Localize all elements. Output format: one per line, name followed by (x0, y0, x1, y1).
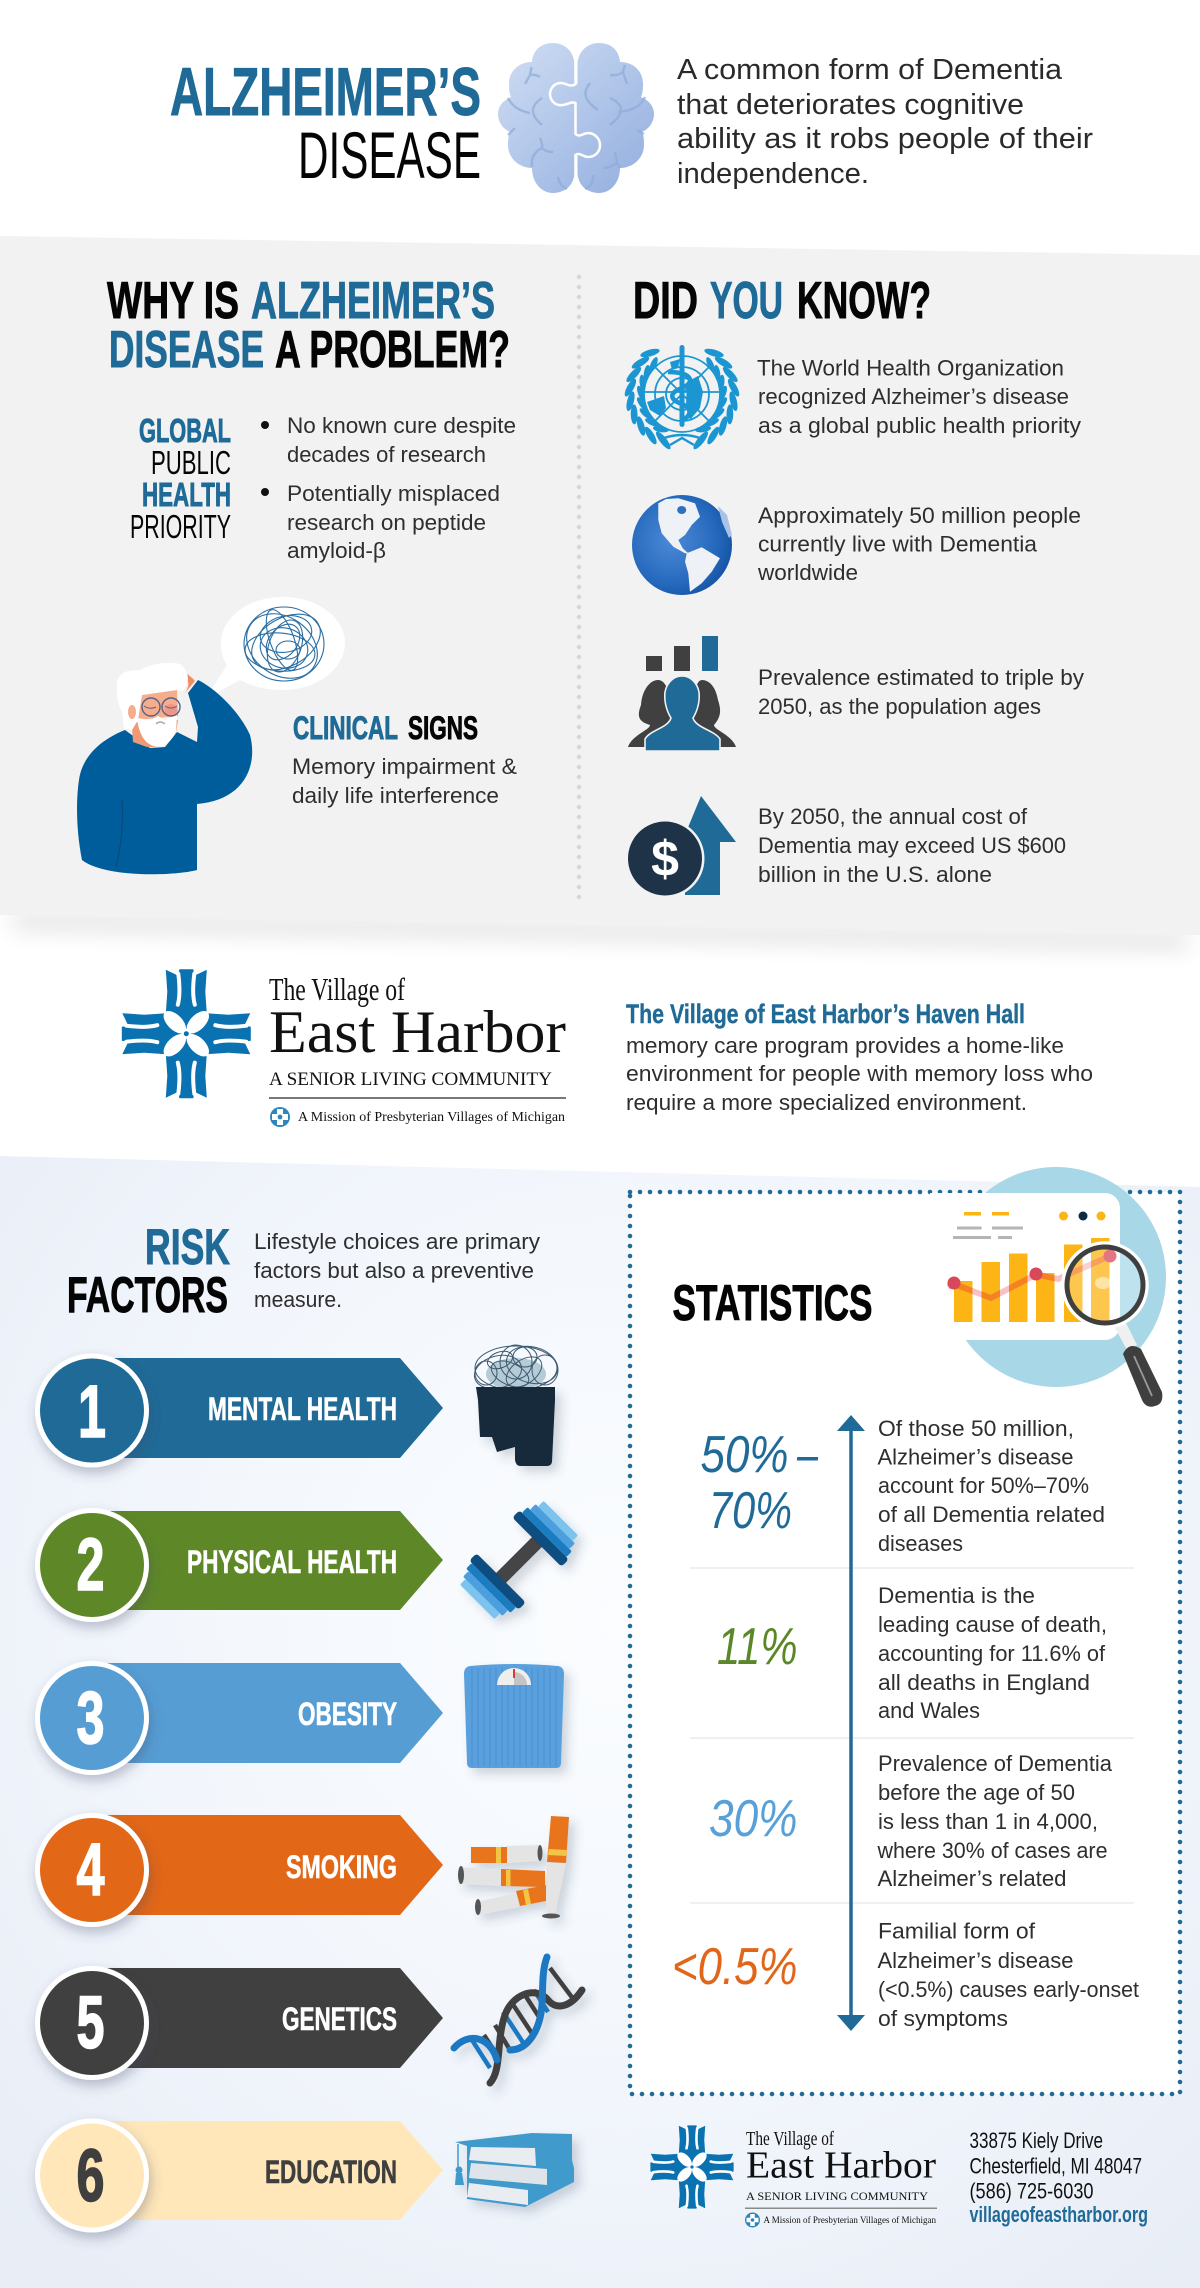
heading: did you know (633, 272, 931, 330)
heading: did you know: YOU (710, 272, 783, 330)
intro text (677, 54, 1093, 190)
intro text: that deteriorates cognitive (677, 89, 1024, 121)
risk 3: obesity (35, 1661, 443, 1775)
logo: East Harbor main: A Mission of Presbyterian Villages of Michigan (298, 1109, 565, 1124)
stat: 11%: 11% (717, 1618, 798, 1676)
speech bubble with scribble (205, 597, 345, 699)
logo: East Harbor footer: East Harbor (746, 2145, 936, 2187)
intro text: ability as it robs people of their (677, 123, 1093, 155)
double-headed arrow (837, 1415, 865, 2031)
bullet list: decades of research (287, 442, 486, 467)
contact details: (586) 725-6030 (970, 2179, 1094, 2204)
title: ALZHEIMER’S (170, 54, 481, 130)
stat: <0.5%: of symptoms (878, 2006, 1008, 2031)
label: global public health priority (130, 412, 231, 545)
fact: WHO: recognized Alzheimer’s disease (758, 384, 1069, 409)
risk 5: genetics (35, 1966, 443, 2080)
logo: East Harbor main: A SENIOR LIVING COMMUNITY (269, 1070, 552, 1090)
panel: lower background (0, 1156, 1200, 2288)
magnifier (1063, 1243, 1162, 1407)
risk 3: obesity: 3 (76, 1676, 104, 1759)
stat: 30%: Alzheimer’s related (878, 1866, 1066, 1891)
stat: 11%: accounting for 11.6% of (878, 1641, 1106, 1666)
icon: books with graduation cap (455, 2133, 574, 2207)
fact: WHO: as a global public health priority (758, 413, 1081, 438)
stat: 50-70%: 70% (709, 1482, 792, 1540)
title: DISEASE (298, 118, 481, 192)
contact details: 33875 Kiely Drive (970, 2128, 1103, 2153)
stat: 50-70%: Of those 50 million, (878, 1416, 1074, 1441)
icon: dollar with arrow: $ (651, 831, 679, 887)
icon: head with tangled thoughts (471, 1341, 562, 1466)
stat: 30% (709, 1751, 1113, 1891)
bullet list: Potentially misplaced (287, 481, 500, 506)
icon: population bars (628, 636, 736, 751)
clinical signs: Memory impairment & (292, 754, 517, 779)
panel: why a problem and did you know (0, 236, 1200, 935)
heading: why is alzheimer's disease a problem: A PROBLEM? (275, 321, 510, 379)
label: global public health priority: PRIORITY (130, 508, 231, 545)
clinical signs: CLINICAL (293, 710, 398, 746)
panel: statistics (630, 1167, 1180, 2094)
fact: annual cost: Dementia may exceed US $600 (758, 833, 1066, 858)
text: Haven Hall: environment for people with memory loss who (626, 1061, 1093, 1086)
risk factors description: factors but also a preventive (254, 1258, 534, 1283)
label: global public health priority: GLOBAL (139, 412, 231, 449)
illustration: confused elderly man (77, 597, 345, 874)
fact: annual cost: billion in the U.S. alone (758, 862, 992, 887)
stat: 30%: before the age of 50 (878, 1780, 1075, 1805)
heading: did you know: DID (633, 272, 698, 330)
stat: 50-70%: of all Dementia related (878, 1502, 1105, 1527)
stat: <0.5%: (<0.5%) causes early-onset (878, 1977, 1139, 2002)
bullet list: research on peptide (287, 510, 486, 535)
contact details (970, 2128, 1148, 2227)
bullet list: No known cure despite (287, 413, 516, 438)
clinical signs (292, 710, 517, 808)
stat: <0.5%: <0.5% (672, 1938, 798, 1996)
stat: 30%: 30% (709, 1790, 798, 1848)
logo: East Harbor main: East Harbor (269, 999, 566, 1065)
icon: bathroom scale (464, 1664, 564, 1768)
fact: WHO (757, 356, 1081, 438)
bullet list: amyloid-β (287, 538, 386, 563)
fact: prevalence: 2050, as the population ages (758, 694, 1041, 719)
stat: 30%: Prevalence of Dementia (878, 1751, 1113, 1776)
risk 5: genetics: GENETICS (282, 2001, 397, 2037)
chart illustration with magnifier (930, 1167, 1166, 1407)
risk 4: smoking (35, 1813, 443, 1927)
stat: <0.5%: Familial form of (878, 1918, 1036, 1944)
fact: prevalence: Prevalence estimated to triple by (758, 665, 1084, 690)
risk 6: education (35, 2118, 443, 2232)
stat: 11%: all deaths in England (878, 1670, 1090, 1695)
risk 1: mental health: MENTAL HEALTH (208, 1391, 397, 1427)
risk 4: smoking: 4 (76, 1828, 104, 1911)
heading: risk factors: RISK (145, 1219, 230, 1275)
stat: 11%: Dementia is the (878, 1583, 1035, 1608)
stat: 11%: and Wales (878, 1698, 980, 1723)
stat: 50-70%: diseases (878, 1531, 963, 1556)
risk 4: smoking: SMOKING (286, 1849, 397, 1885)
risk 1: mental health (35, 1354, 443, 1468)
risk 2: physical health: 2 (76, 1523, 104, 1606)
icon: dollar with arrow (626, 796, 736, 898)
panel shadow (12, 915, 1188, 947)
fact: 50 million people: worldwide (757, 560, 858, 585)
icon: globe (632, 495, 732, 595)
heading: risk factors (67, 1219, 230, 1323)
title (170, 54, 481, 192)
text: Haven Hall: require a more specialized environment. (626, 1090, 1027, 1115)
logo: East Harbor footer: The Village of (746, 2128, 834, 2150)
text: Haven Hall (626, 999, 1093, 1115)
fact: 50 million people: Approximately 50 million people (758, 503, 1081, 528)
stat: 50-70%: – (796, 1426, 819, 1484)
stat: <0.5%: Alzheimer’s disease (878, 1948, 1074, 1973)
logo: East Harbor main (122, 969, 566, 1127)
heading: why is alzheimer's disease a problem: WHY IS (107, 272, 239, 330)
icon: brain puzzle (498, 43, 654, 193)
risk factors description: measure. (254, 1287, 342, 1312)
heading: statistics: STATISTICS (672, 1275, 872, 1331)
fact: annual cost (758, 804, 1066, 887)
risk factors description (254, 1229, 540, 1312)
fact: prevalence (758, 665, 1084, 719)
logo: East Harbor main: The Village of (269, 971, 405, 1007)
logo: East Harbor footer: A SENIOR LIVING COMMUNITY (746, 2189, 928, 2203)
label: global public health priority: HEALTH (142, 476, 231, 513)
risk 2: physical health: PHYSICAL HEALTH (187, 1544, 397, 1580)
stat: 11%: leading cause of death, (878, 1612, 1107, 1637)
heading: why is alzheimer's disease a problem: ALZHEIMER’S (251, 272, 495, 330)
stat: 11% (717, 1583, 1107, 1723)
stat: 30%: where 30% of cases are (877, 1838, 1108, 1863)
icon: DNA helix (454, 1957, 582, 2083)
text: Haven Hall: The Village of East Harbor’s Haven Hall (626, 999, 1025, 1029)
intro text: A common form of Dementia (677, 54, 1063, 86)
label: global public health priority: PUBLIC (151, 444, 231, 481)
icon: WHO emblem (623, 345, 741, 451)
risk 5: genetics: 5 (76, 1981, 104, 2064)
fact: WHO: The World Health Organization (757, 356, 1064, 380)
stat: 50-70%: account for 50%–70% (878, 1473, 1089, 1498)
header section (170, 43, 1093, 193)
fact: 50 million people (757, 503, 1081, 585)
intro text: independence. (677, 158, 869, 190)
risk 3: obesity: OBESITY (298, 1696, 397, 1732)
risk 2: physical health (35, 1508, 443, 1622)
heading: why is alzheimer's disease a problem: DISEASE (109, 321, 264, 379)
risk 1: mental health: 1 (78, 1370, 106, 1453)
stat: 50-70%: Alzheimer’s disease (878, 1445, 1074, 1470)
panel: risk factors (35, 1219, 585, 2232)
logo: East Harbor footer: A Mission of Presbyterian Villages of Michigan (764, 2215, 936, 2225)
fact: 50 million people: currently live with Dementia (758, 532, 1038, 556)
fact: annual cost: By 2050, the annual cost of (758, 804, 1028, 829)
risk 6: education: 6 (76, 2134, 104, 2217)
clinical signs: SIGNS (408, 710, 478, 746)
logo: East Harbor footer (650, 2125, 937, 2228)
stat: <0.5% (672, 1918, 1139, 2031)
heading: did you know: KNOW? (797, 272, 931, 330)
stat: 50-70% (700, 1416, 1105, 1556)
contact details: Chesterfield, MI 48047 (970, 2153, 1142, 2178)
icon: dumbbell (453, 1494, 585, 1626)
clinical signs: daily life interference (292, 783, 499, 808)
heading: why is alzheimer's disease a problem (107, 272, 510, 379)
man (77, 663, 252, 874)
icon: cigarettes (458, 1816, 569, 1918)
bullet list (261, 413, 516, 563)
risk factors description: Lifestyle choices are primary (254, 1229, 540, 1254)
heading: risk factors: FACTORS (67, 1267, 228, 1323)
text: Haven Hall: memory care program provides a home-like (626, 1033, 1064, 1058)
stat: 30%: is less than 1 in 4,000, (878, 1809, 1098, 1834)
risk 6: education: EDUCATION (265, 2154, 397, 2190)
stat: 50-70%: 50% (700, 1426, 788, 1484)
